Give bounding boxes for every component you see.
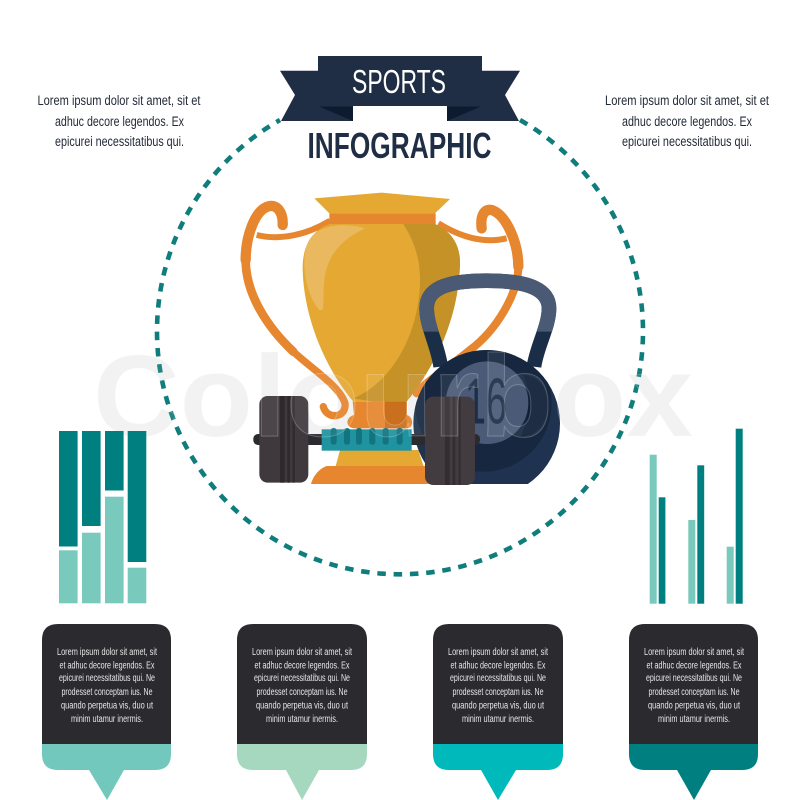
card text: quando perpetua vis, duo ut — [648, 700, 740, 712]
card text: epicurei necessitatibus qui. Ne — [450, 673, 546, 684]
stacked bar chart — [59, 431, 146, 603]
card text: quando perpetua vis, duo ut — [61, 700, 153, 712]
dumbbell — [253, 396, 480, 485]
card text: et adhuc decore legendos. Ex — [254, 660, 350, 672]
subtitle heading: INFOGRAPHIC — [308, 125, 492, 166]
card text: et adhuc decore legendos. Ex — [60, 660, 154, 672]
card text: minim utamur inermis. — [71, 714, 143, 725]
panel: callout card 2 — [237, 624, 367, 800]
card text: Lorem ipsum dolor sit amet, sit — [644, 647, 744, 658]
top left text block: epicurei necessitatibus qui. — [55, 134, 184, 149]
card text: quando perpetua vis, duo ut — [256, 700, 348, 712]
card text — [252, 647, 352, 725]
top right text block: Lorem ipsum dolor sit amet, sit et — [605, 93, 769, 108]
panel: callout card 1 — [42, 624, 171, 800]
card text: et adhuc decore legendos. Ex — [646, 660, 742, 672]
card text: minim utamur inermis. — [462, 714, 534, 725]
card text: et adhuc decore legendos. Ex — [450, 660, 546, 672]
card text: minim utamur inermis. — [266, 714, 338, 725]
card text: Lorem ipsum dolor sit amet, sit — [252, 647, 352, 658]
card text: epicurei necessitatibus qui. Ne — [646, 673, 742, 684]
trophy and weights illustration — [246, 193, 560, 497]
card text: minim utamur inermis. — [658, 714, 730, 725]
card text: prodesset conceptam ius. Ne — [256, 687, 348, 698]
top left text block — [38, 93, 201, 149]
watermark: Colourbox — [93, 331, 693, 461]
card text — [448, 647, 548, 725]
panel: callout card 4 — [629, 624, 758, 800]
top left text block: adhuc decore legendos. Ex — [55, 114, 184, 129]
card text — [57, 647, 157, 725]
banner heading: SPORTS — [352, 63, 446, 100]
dashed circle — [157, 120, 643, 574]
card text: quando perpetua vis, duo ut — [452, 700, 544, 712]
card text: Lorem ipsum dolor sit amet, sit — [57, 647, 157, 658]
grouped bar chart — [650, 429, 743, 604]
top right text block: epicurei necessitatibus qui. — [622, 134, 752, 149]
banner ribbon — [280, 56, 520, 121]
card text: epicurei necessitatibus qui. Ne — [59, 673, 155, 684]
card text: epicurei necessitatibus qui. Ne — [254, 673, 350, 684]
card text: prodesset conceptam ius. Ne — [648, 687, 740, 698]
kettlebell — [413, 281, 560, 497]
card text: prodesset conceptam ius. Ne — [62, 687, 153, 698]
card text: prodesset conceptam ius. Ne — [452, 687, 544, 698]
card text — [644, 647, 744, 725]
top right text block: adhuc decore legendos. Ex — [622, 114, 752, 129]
trophy — [246, 193, 518, 484]
top right text block — [605, 93, 769, 149]
panel: callout card 3 — [433, 624, 563, 800]
card text: Lorem ipsum dolor sit amet, sit — [448, 647, 548, 658]
top left text block: Lorem ipsum dolor sit amet, sit et — [38, 93, 201, 108]
watermark overlay: Colourbox — [93, 331, 693, 461]
weight number: 16 — [465, 365, 507, 438]
